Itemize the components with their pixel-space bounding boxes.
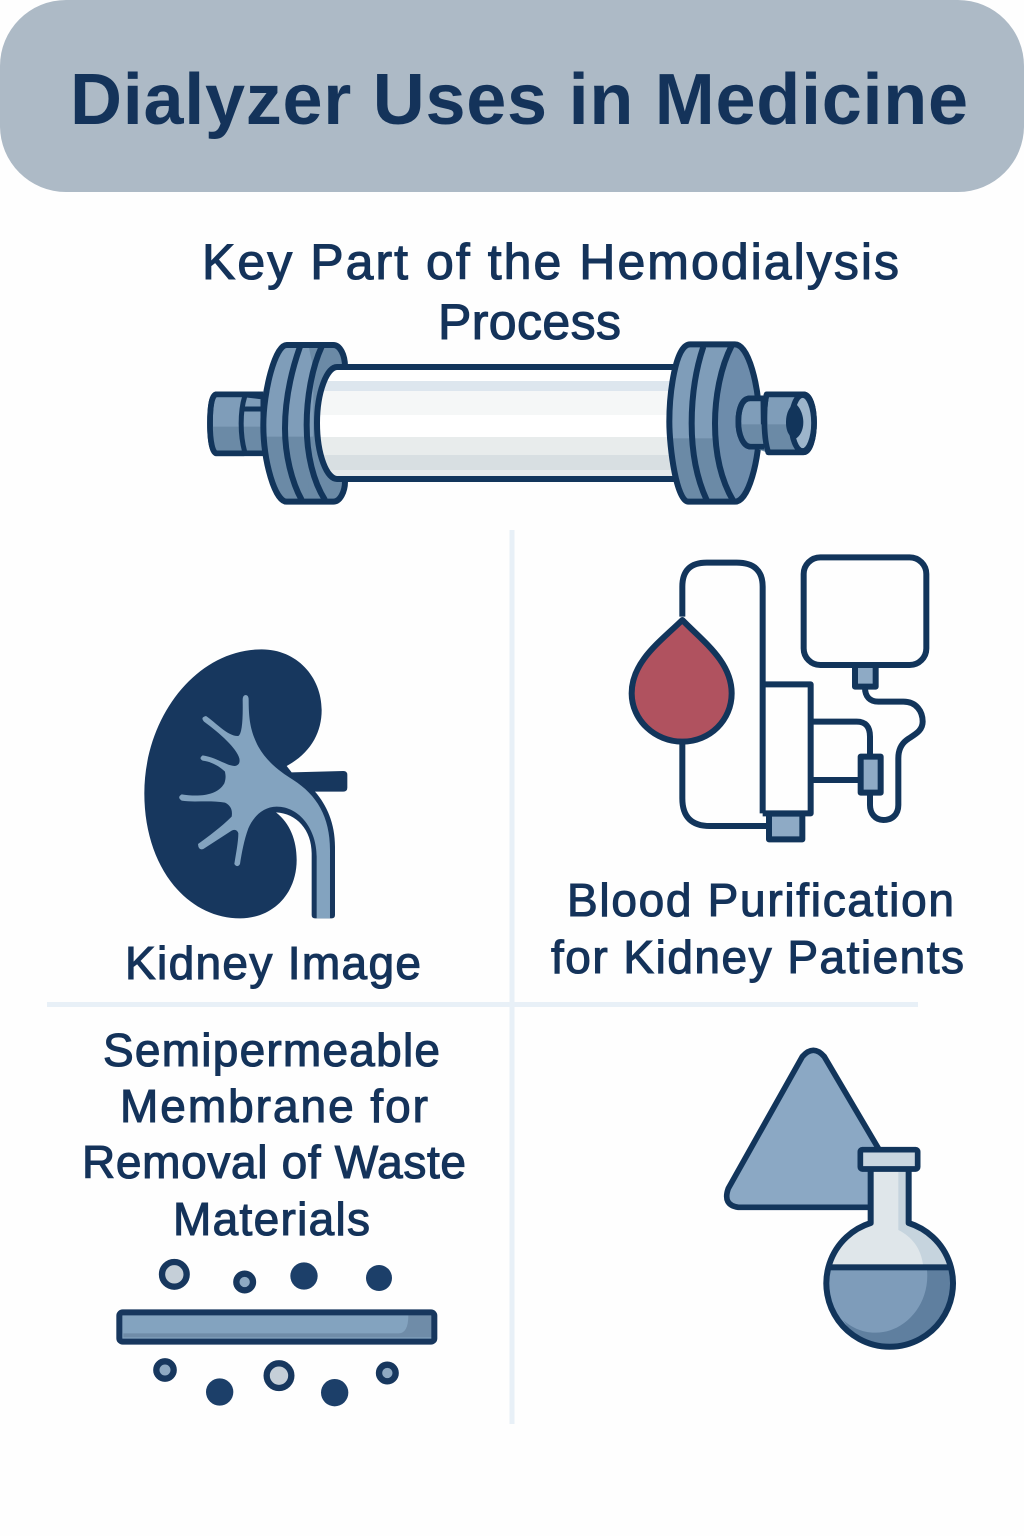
heading: hemodialysis process: Key Part of the Hemodialysis <box>202 234 899 290</box>
monitor <box>804 557 926 665</box>
divider: horizontal <box>47 1002 918 1007</box>
icon: dialyzer cartridge <box>207 344 815 503</box>
membrane bar <box>119 1312 434 1342</box>
label: semipermeable membrane: Membrane for <box>120 1080 428 1132</box>
divider: vertical <box>510 530 514 1424</box>
dialyzer box <box>763 684 811 813</box>
round flask <box>823 1150 957 1351</box>
icon: kidney <box>144 649 347 918</box>
dialyzer tube <box>310 367 680 479</box>
inline filter <box>861 757 881 793</box>
ring particles <box>156 1262 396 1388</box>
left flange <box>262 345 347 503</box>
blood tubing <box>682 563 768 826</box>
title: Dialyzer Uses in Medicine <box>70 60 968 140</box>
right connector <box>738 394 815 454</box>
left connector <box>207 394 265 457</box>
kidney body <box>144 649 347 918</box>
header banner <box>0 0 1024 192</box>
icon: triangle and flask <box>727 1050 957 1351</box>
label: blood purification: Blood Purification <box>567 874 954 926</box>
monitor connector <box>855 665 876 687</box>
label: semipermeable membrane: Materials <box>173 1193 370 1245</box>
triangle <box>727 1050 878 1207</box>
label: kidney image: Kidney Image <box>125 937 421 989</box>
icon: blood purification circuit <box>632 557 926 839</box>
label: semipermeable membrane: Semipermeable <box>103 1024 440 1076</box>
renal pelvis and ureter <box>179 695 330 918</box>
label: semipermeable membrane <box>82 1024 466 1245</box>
bottom connector <box>769 814 802 839</box>
heading: hemodialysis process: Process <box>438 294 621 350</box>
blood drop <box>632 620 732 742</box>
heading: hemodialysis process <box>202 234 899 350</box>
solid particles <box>206 1262 392 1406</box>
label: blood purification: for Kidney Patients <box>551 931 964 983</box>
label: semipermeable membrane: Removal of Waste <box>82 1136 466 1188</box>
label: blood purification <box>551 874 964 983</box>
icon: membrane with particles <box>119 1262 434 1406</box>
return tube <box>813 688 923 820</box>
right flange <box>667 344 762 503</box>
